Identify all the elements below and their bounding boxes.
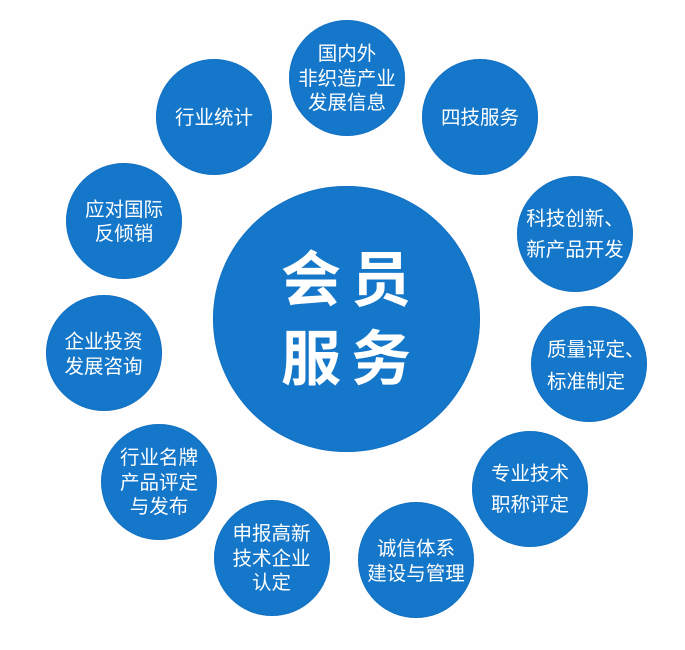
circle: 行业名牌产品评定与发布: 行业名牌	[120, 447, 198, 469]
circle: 科技创新、新产品开发	[517, 176, 633, 292]
circle: 四技服务	[422, 58, 538, 174]
circle: 申报高新技术企业认定: 申报高新	[232, 523, 310, 545]
center circle: 会员服务: 服务	[281, 326, 421, 392]
circle: 行业统计: 行业统计	[175, 107, 253, 129]
circle: 四技服务: 四技服务	[441, 107, 519, 129]
circle: 科技创新、新产品开发: 新产品开发	[526, 239, 624, 261]
circle: 专业技术职称评定	[472, 430, 588, 546]
circle: 科技创新、新产品开发: 科技创新、	[526, 208, 624, 230]
circle: 行业名牌产品评定与发布: 产品评定	[120, 472, 198, 494]
circle: 质量评定、标准制定	[531, 306, 647, 422]
circle: 诚信体系建设与管理	[358, 502, 474, 618]
circle: 质量评定、标准制定: 质量评定、	[547, 338, 645, 360]
circle: 应对国际反倾销: 反倾销	[95, 223, 153, 245]
circle: 行业名牌产品评定与发布	[101, 424, 217, 540]
circle: 专业技术职称评定: 专业技术	[491, 463, 569, 485]
circle: 应对国际反倾销	[66, 162, 182, 278]
circle: 国内外非织造产业发展信息: 国内外	[318, 43, 376, 65]
circle: 国内外非织造产业发展信息	[289, 20, 405, 136]
circle: 国内外非织造产业发展信息: 非织造产业	[298, 68, 396, 90]
circle: 质量评定、标准制定: 标准制定	[547, 370, 625, 392]
circle: 企业投资发展咨询	[46, 295, 162, 411]
circle: 行业统计	[156, 59, 272, 175]
circle: 诚信体系建设与管理: 建设与管理	[367, 562, 465, 584]
circle: 诚信体系建设与管理: 诚信体系	[377, 538, 455, 560]
circle: 申报高新技术企业认定: 认定	[252, 572, 291, 594]
circle: 应对国际反倾销: 应对国际	[85, 198, 163, 220]
circle: 申报高新技术企业认定	[214, 500, 330, 616]
center circle: 会员服务	[213, 186, 480, 452]
circle: 企业投资发展咨询: 企业投资	[64, 331, 142, 353]
circle: 申报高新技术企业认定: 技术企业	[232, 548, 310, 570]
circle: 行业名牌产品评定与发布: 与发布	[130, 496, 188, 518]
circle: 企业投资发展咨询: 发展咨询	[64, 356, 142, 378]
circle: 国内外非织造产业发展信息: 发展信息	[308, 92, 386, 114]
center circle: 会员服务: 会员	[281, 246, 421, 314]
circle: 专业技术职称评定: 职称评定	[491, 494, 569, 516]
